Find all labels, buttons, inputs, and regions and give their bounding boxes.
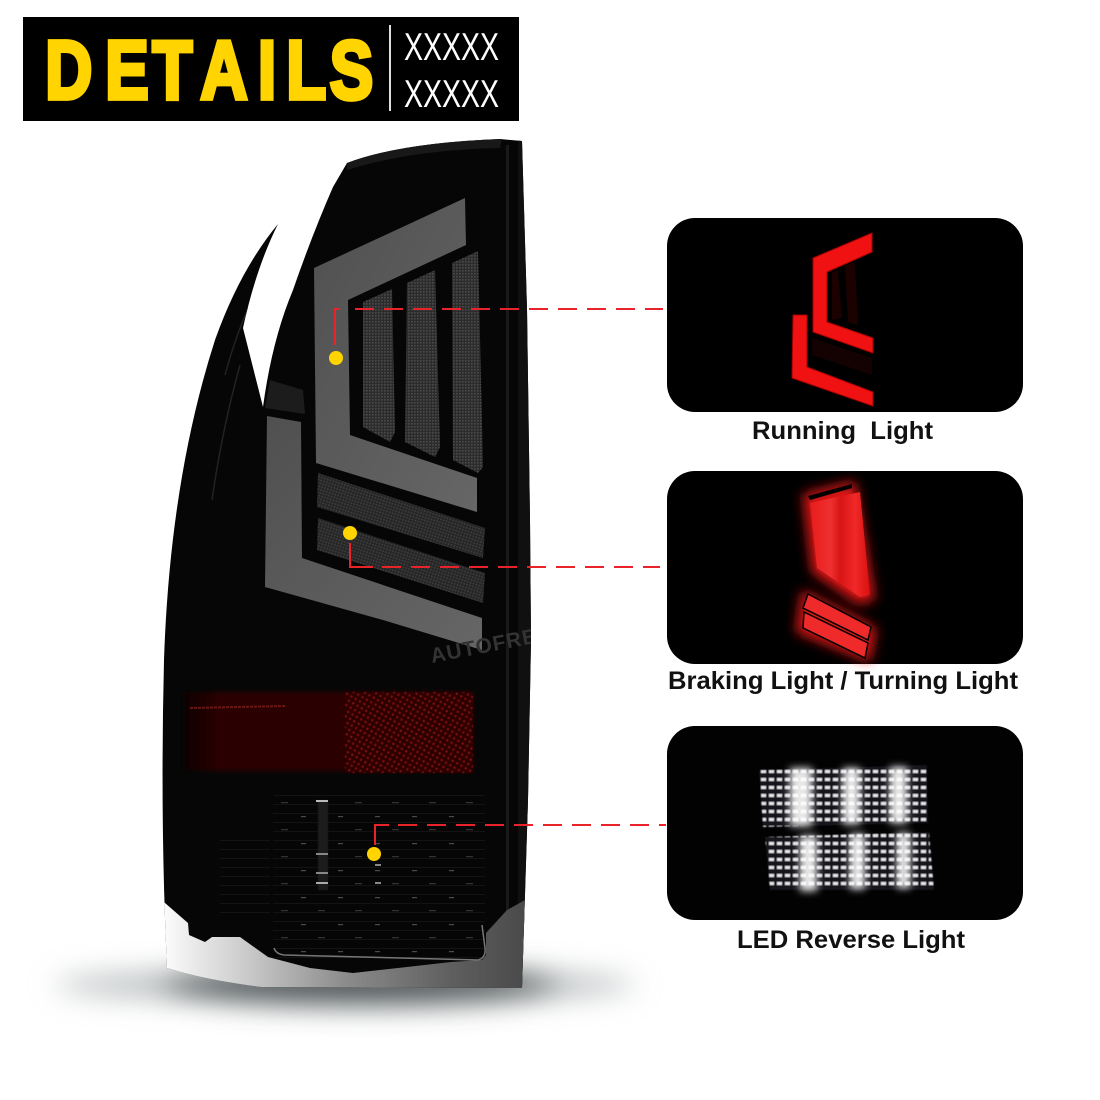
inner lens bottom edge xyxy=(274,925,485,960)
faint lens glow xyxy=(812,262,872,375)
watermark: AUTOFRE xyxy=(429,625,539,668)
lower light bar xyxy=(265,416,482,650)
callout: braking light leader xyxy=(343,526,660,567)
title: DETAILS: DETAILS xyxy=(45,24,373,116)
panel: reverse light xyxy=(667,726,1023,920)
vertical lens 2 xyxy=(405,270,440,457)
upper frame xyxy=(346,139,502,170)
bottom lip xyxy=(164,900,525,988)
vertical lens 3 xyxy=(452,251,483,473)
bright led columns xyxy=(790,767,910,891)
tail light product xyxy=(162,139,531,988)
led block top xyxy=(759,765,928,827)
title banner xyxy=(23,17,519,121)
step block xyxy=(265,380,305,414)
vertical lens 1 xyxy=(363,289,395,442)
glow halo xyxy=(796,481,876,662)
lower lens 2 xyxy=(803,612,868,658)
placeholder text line 2: XXXXX xyxy=(404,73,499,116)
upper lens xyxy=(810,492,870,597)
panel: braking light xyxy=(667,471,1023,664)
placeholder text line 1: XXXXX xyxy=(404,26,499,69)
label: braking light: Braking Light / Turning Light xyxy=(668,667,1019,695)
panel: running light xyxy=(667,218,1023,412)
horizontal lens 2 xyxy=(317,518,485,603)
callout: running light leader xyxy=(329,309,663,365)
horizontal lens 1 xyxy=(317,473,485,558)
glow lower bar xyxy=(792,315,873,406)
led block bottom xyxy=(765,832,934,890)
glow upper bar xyxy=(813,233,873,353)
side streaks xyxy=(212,306,248,500)
red reflector band xyxy=(183,692,473,773)
label: running light: Running Light xyxy=(752,417,934,445)
reverse light lens xyxy=(220,793,485,958)
upper light bar xyxy=(314,198,477,512)
right edge strip xyxy=(506,145,509,911)
divider xyxy=(389,25,391,111)
lower lens 1 xyxy=(803,594,871,640)
top strip xyxy=(808,484,852,500)
label: reverse light: LED Reverse Light xyxy=(737,926,966,954)
callout: reverse light leader xyxy=(367,825,666,861)
ground shadow xyxy=(55,965,635,1005)
